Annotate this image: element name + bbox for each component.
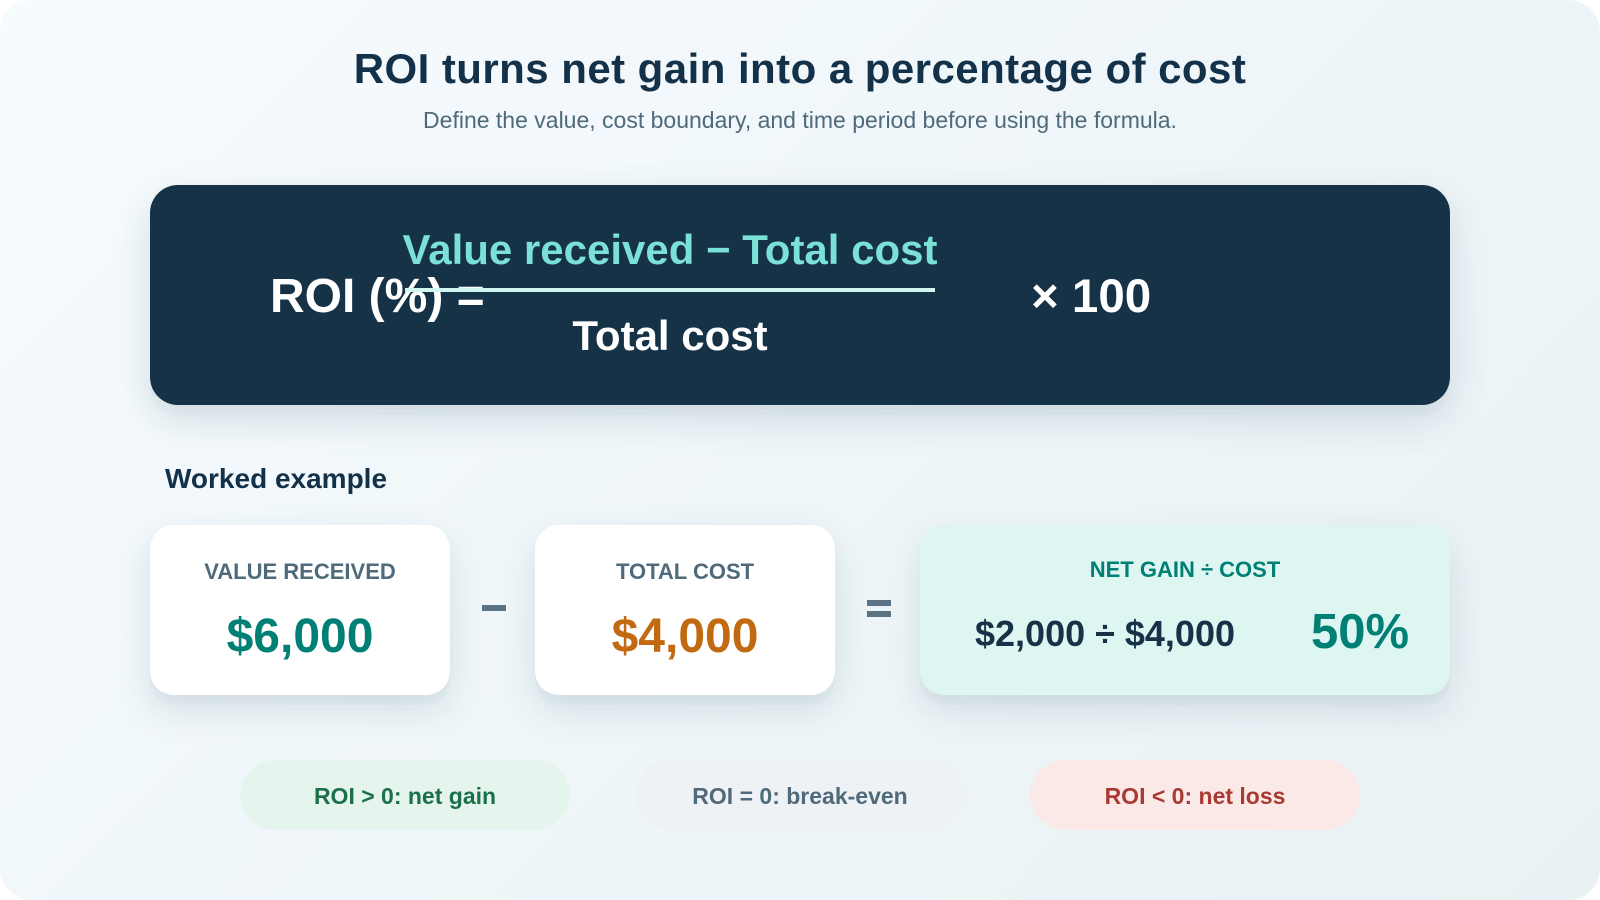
result: 50% [1311,605,1409,659]
minus operator [482,605,506,611]
pill: net loss [1030,760,1360,830]
equals operator [867,600,891,617]
multiplier: × 100 [1031,270,1151,323]
calculation: $2,000 ÷ $4,000 [975,613,1235,654]
pill text: ROI = 0: break-even [692,783,908,809]
formula label: ROI (%) = [270,270,485,323]
denominator: Total cost [572,312,768,359]
pill: break-even [635,760,965,830]
title: ROI turns net gain into a percentage of cost [354,45,1246,92]
value: $4,000 [612,610,758,663]
subtitle: Define the value, cost boundary, and time period before using the formula. [423,107,1177,133]
card: value received [150,525,450,695]
value: $6,000 [227,610,373,663]
fraction bar [405,288,935,292]
numerator: Value received − Total cost [403,226,937,273]
card: total cost [535,525,835,695]
pill text: ROI < 0: net loss [1105,783,1285,809]
card: result [920,525,1450,695]
label: VALUE RECEIVED [204,559,396,584]
label: TOTAL COST [616,559,754,584]
label: NET GAIN ÷ COST [1090,557,1280,582]
pill: net gain [240,760,570,830]
section heading: Worked example [165,463,387,494]
panel: formula [150,185,1450,405]
pill text: ROI > 0: net gain [314,783,496,809]
